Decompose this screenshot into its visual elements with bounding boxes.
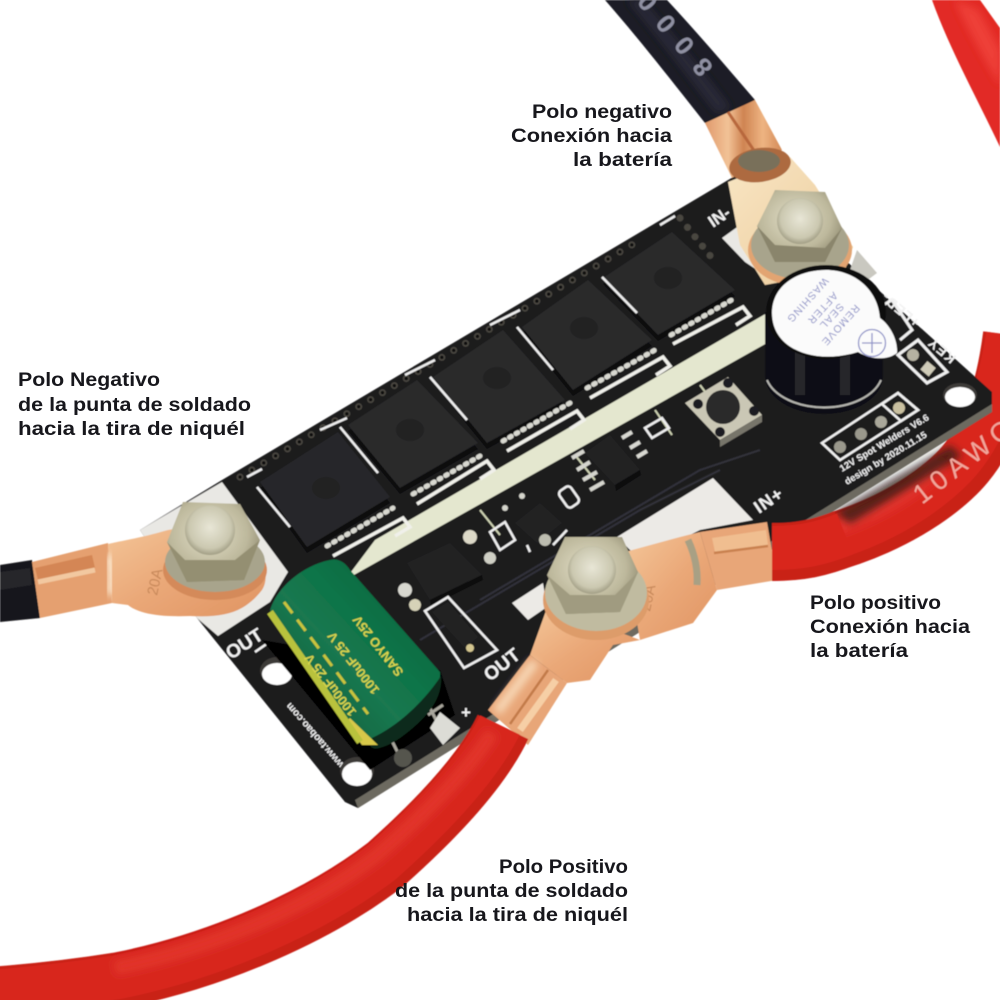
chip: 8-pin IC [572, 432, 647, 491]
mounting hole bottom [340, 757, 374, 786]
capacitor print: 1000uF 25 V [301, 651, 359, 719]
label: positive battery pole: Conexión hacia [810, 617, 970, 638]
sticker text: SEAL [816, 301, 846, 331]
chip: lower diode [425, 597, 497, 668]
silk: OUT dash [255, 643, 268, 652]
capacitor leads [383, 693, 443, 757]
label: negative welding tip pole [18, 370, 251, 440]
capacitor print: 1000uF 25 V [324, 629, 382, 697]
silk: IN minus: IN- [705, 203, 734, 231]
label: positive welding tip pole [395, 857, 628, 926]
red cable right end over lug [772, 534, 845, 552]
lug tubes [705, 100, 782, 178]
left lug with bolt [32, 502, 267, 618]
buzzer rim [766, 265, 886, 359]
silk: right side pad row [822, 393, 918, 460]
silk: KEY pads [880, 300, 947, 383]
center lugs and bolt [488, 522, 777, 745]
label: positive battery pole: la batería [810, 641, 909, 662]
mosfet 2 [320, 380, 494, 504]
lug solder seam [688, 540, 697, 585]
bottom lug plate [530, 605, 640, 683]
mounting hole right [943, 383, 977, 407]
mosfet 5 [602, 216, 750, 344]
sticker text: WASHING [784, 275, 831, 325]
lug solder blob [727, 144, 793, 186]
silk: IN plus: IN+ [750, 483, 787, 517]
sticker text: REMOVE [819, 302, 862, 348]
label: positive welding tip pole: de la punta de soldado [395, 881, 628, 902]
black cable top [605, 0, 755, 123]
top washer [748, 214, 852, 286]
board edge highlight [355, 404, 992, 808]
buzzer body [765, 312, 883, 414]
capacitor pads [394, 749, 412, 767]
bottom lug tube [488, 655, 567, 745]
left hex nut [167, 502, 260, 582]
buzzer sticker [772, 270, 897, 358]
mosfet 3 [405, 330, 584, 451]
right lug tube [700, 522, 777, 590]
label: negative welding tip pole: Polo Negativo [18, 370, 160, 391]
center washer [543, 560, 649, 640]
red cable right [772, 335, 1000, 552]
black cable left [0, 560, 40, 622]
left lug tube [32, 543, 112, 618]
right silver pad [617, 478, 753, 560]
capacitor body [270, 559, 440, 745]
left lug plate [108, 520, 266, 616]
silk: version text: 12V Spot Welders V6.6 [838, 412, 931, 475]
mosfet 1 [247, 432, 410, 556]
capacitor [262, 559, 460, 770]
silk: plus: + [461, 703, 471, 722]
silk: version text: design by 2020.11.15 [843, 429, 930, 488]
center hex nut [547, 537, 638, 614]
right lug engraving: 20A [637, 583, 659, 613]
silk: website: www.taobao.com [284, 700, 347, 770]
label: positive battery pole: Polo positivo [810, 593, 941, 614]
capacitor yellow band [270, 612, 360, 742]
label: negative battery pole: la batería [573, 150, 673, 171]
label: negative battery pole: Conexión hacia [511, 126, 672, 147]
capacitor print: SANYO 25V [349, 612, 406, 679]
lug engraving: 20A [144, 567, 166, 597]
board base [140, 170, 992, 808]
sticker plus sign [858, 330, 886, 356]
sticker text [784, 275, 862, 348]
capacitor base [370, 676, 441, 749]
circuit board [140, 170, 992, 808]
chip: optocoupler [398, 530, 496, 611]
silk: KEY label: KEY [924, 334, 959, 367]
capacitor shadow [262, 640, 455, 770]
left silver pad [140, 482, 288, 636]
label: negative battery pole [511, 102, 673, 171]
red cable bottom [0, 725, 503, 995]
lower trace lines [420, 450, 760, 640]
silk: OUT right: OUT [480, 644, 525, 686]
capacitor print [301, 612, 406, 719]
left washer [163, 540, 267, 600]
cream tape band [345, 313, 767, 580]
right lug plate [625, 532, 717, 640]
label: positive welding tip pole: hacia la tira de niquél [407, 905, 628, 926]
top silver pads [722, 225, 760, 272]
label: negative welding tip pole: hacia la tira de niquél [18, 419, 245, 440]
tactile button [685, 377, 762, 447]
mosfet 4 [490, 280, 670, 398]
chip: small transistor [502, 493, 567, 552]
shadow under board [835, 445, 962, 524]
silk: resistor outlines [490, 418, 669, 550]
buzzer [765, 265, 897, 414]
label: negative welding tip pole: de la punta de soldado [18, 395, 251, 416]
sticker text: AFTER [805, 289, 840, 327]
label: positive welding tip pole: Polo Positivo [499, 857, 628, 878]
red cable top right [932, 0, 1000, 147]
small lower silver pad [512, 583, 547, 620]
mounting hole left [260, 657, 294, 685]
top lug with bolt [705, 100, 853, 286]
silk: LED label: +LED- [878, 289, 923, 331]
lug plate [728, 157, 853, 285]
vias row [240, 243, 635, 477]
top hex nut [757, 190, 842, 262]
label: positive battery pole [810, 593, 970, 662]
silk: OUT left: OUT [222, 625, 268, 664]
label: negative battery pole: Polo negativo [532, 102, 672, 123]
